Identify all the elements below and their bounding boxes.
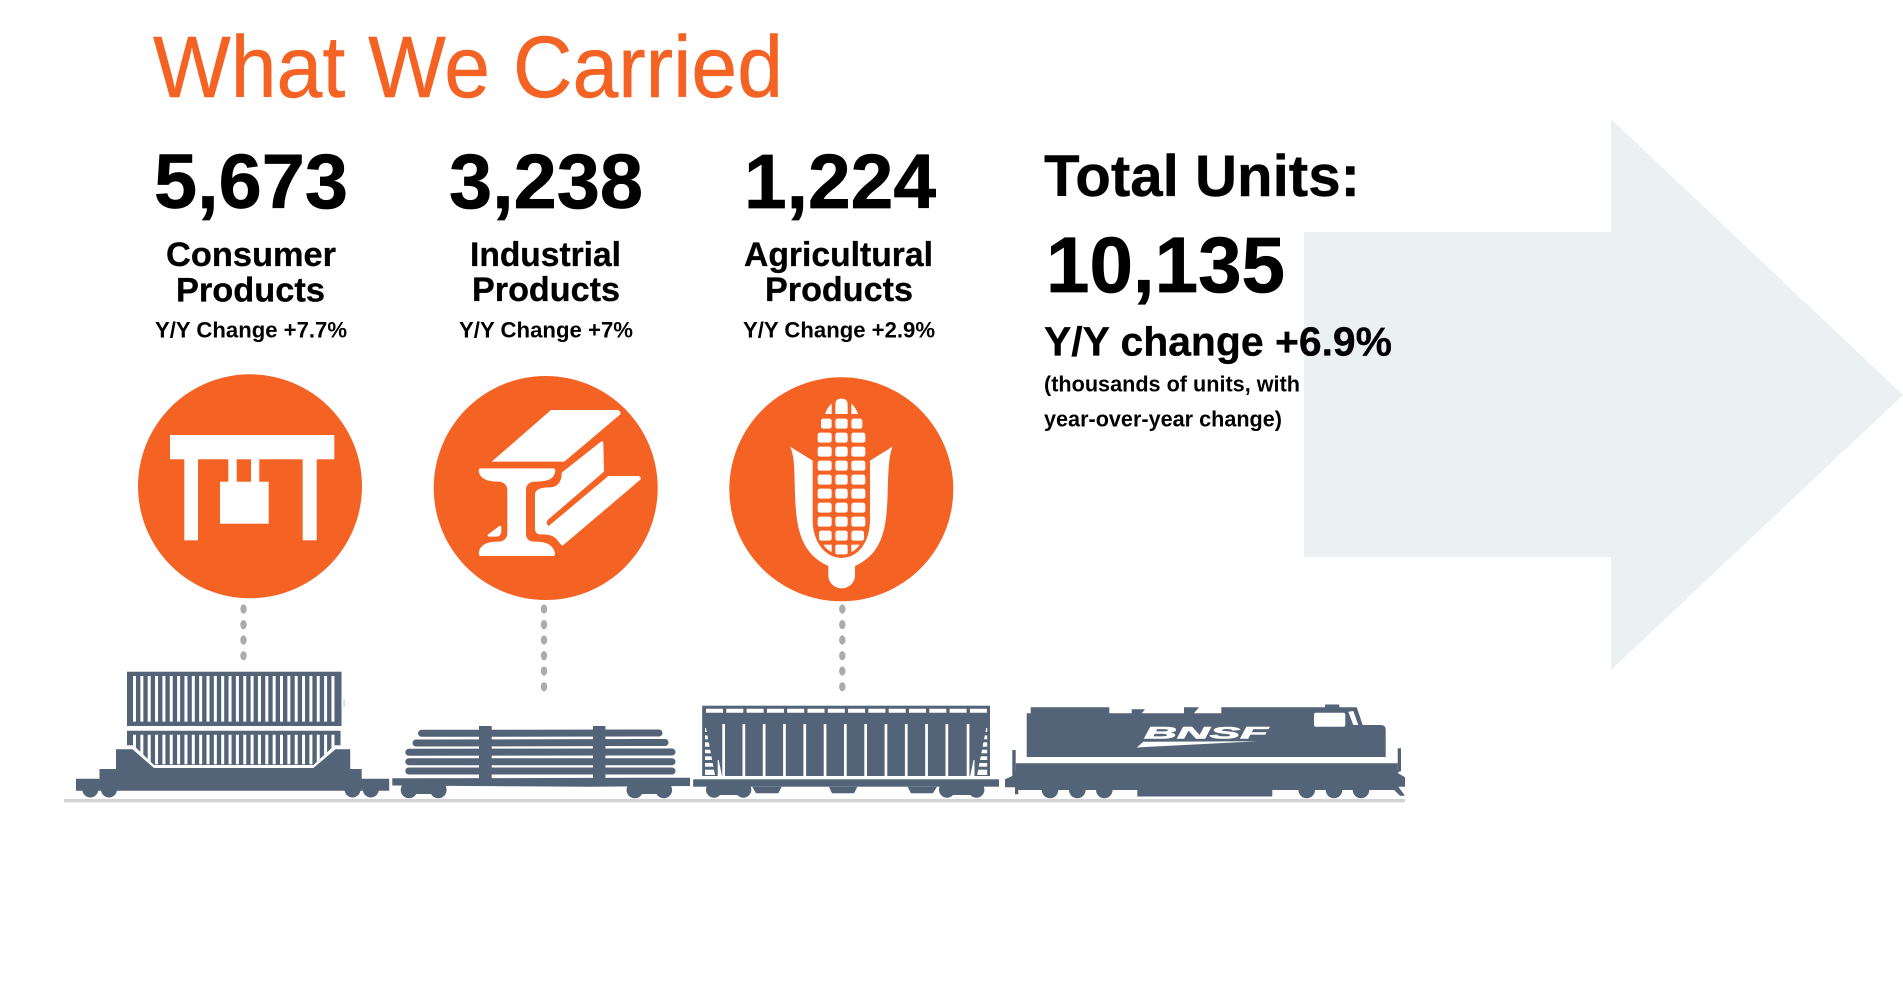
icon: steel i-beam — [434, 376, 658, 600]
agricultural label: Agricultural — [744, 236, 933, 274]
BNSF logo — [1137, 725, 1271, 748]
icon: gantry crane — [138, 374, 362, 598]
title: What We Carried — [153, 19, 783, 116]
panel: total units — [1044, 144, 1392, 432]
connector dots — [240, 604, 247, 660]
total change: Y/Y change +6.9% — [1044, 318, 1392, 364]
agricultural change: Y/Y Change +2.9% — [743, 318, 935, 342]
hopper car — [693, 706, 999, 798]
log flatcar — [392, 726, 690, 798]
total heading: Total Units: — [1044, 144, 1360, 209]
industrial value: 3,238 — [449, 139, 643, 225]
background arrow — [1304, 119, 1903, 670]
consumer value: 5,673 — [154, 139, 348, 225]
total value: 10,135 — [1046, 220, 1285, 309]
consumer label — [166, 236, 336, 310]
agricultural label — [744, 236, 933, 309]
BNSF locomotive — [1005, 704, 1405, 798]
consumer label: Consumer — [166, 236, 336, 274]
agricultural value: 1,224 — [744, 139, 936, 225]
units note — [1044, 372, 1300, 432]
panel: consumer products — [138, 139, 362, 660]
industrial label: Products — [472, 271, 620, 309]
agricultural label: Products — [765, 271, 913, 309]
container car — [76, 672, 389, 798]
consumer label: Products — [176, 272, 325, 310]
units note: (thousands of units, with — [1044, 372, 1300, 396]
train — [64, 672, 1405, 802]
industrial label: Industrial — [470, 236, 621, 274]
consumer change: Y/Y Change +7.7% — [155, 318, 347, 342]
units note: year-over-year change) — [1044, 406, 1282, 432]
industrial label — [470, 236, 621, 309]
infographic canvas — [64, 33, 1903, 802]
panel: industrial products — [434, 139, 658, 691]
industrial change: Y/Y Change +7% — [459, 318, 633, 342]
ground line — [64, 799, 1405, 802]
connector dots — [541, 604, 547, 691]
BNSF logo: BNSF — [1144, 725, 1271, 743]
connector dots — [839, 604, 846, 691]
panel: agricultural products — [729, 139, 953, 691]
icon: corn cob — [729, 377, 953, 601]
